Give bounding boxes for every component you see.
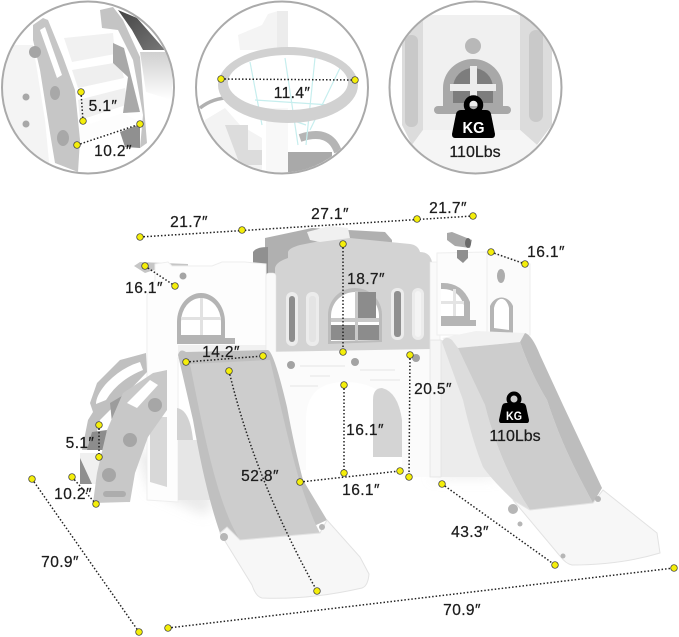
label: arch width: 16.1″ (342, 482, 380, 499)
left tower (134, 262, 266, 502)
label: slide width: 14.2″ (202, 344, 240, 361)
staircase (80, 353, 167, 503)
inset: window and weight capacity (389, 0, 563, 176)
label: short slide length: 43.3″ (451, 524, 489, 541)
left slide (178, 350, 369, 598)
floor shadows (135, 445, 500, 515)
label: inset step height: 5.1″ (89, 98, 117, 115)
label: left tower depth: 16.1″ (125, 280, 163, 297)
label: panel height: 18.7″ (347, 271, 385, 288)
play structure (80, 226, 660, 598)
inset: window and weight capacity: 110Lbs (449, 144, 501, 161)
inset: basketball hoop detail (195, 0, 370, 176)
label: left top width: 21.7″ (170, 214, 208, 231)
center front gray panel (266, 226, 440, 357)
label: long slide length: 52.8″ (241, 468, 279, 485)
label: platform height: 20.5″ (414, 381, 452, 398)
back gray panel (253, 228, 392, 345)
weight label on slide: 110Lbs (489, 428, 541, 445)
label: overall width: 70.9″ (443, 602, 481, 619)
label: arch height: 16.1″ (346, 422, 384, 439)
center brick wall with arch (262, 349, 432, 484)
label: hoop diameter: 11.4″ (274, 85, 310, 102)
label: center top width: 27.1″ (311, 206, 349, 223)
icon: weight on slide (499, 394, 529, 423)
label: stair step height: 5.1″ (66, 435, 94, 452)
label: right tower depth: 16.1″ (527, 244, 565, 261)
right slide (442, 333, 660, 565)
label: inset step width: 10.2″ (94, 143, 132, 160)
icon: weight on slide: KG (506, 409, 522, 423)
label: stair step width: 10.2″ (54, 486, 92, 503)
right tower (430, 252, 530, 477)
inset: stairs detail (0, 0, 176, 176)
inset: window and weight capacity: KG (462, 120, 484, 137)
label: right top width: 21.7″ (429, 200, 467, 217)
label: overall depth: 70.9″ (41, 554, 79, 571)
icon: telescope (447, 232, 472, 263)
